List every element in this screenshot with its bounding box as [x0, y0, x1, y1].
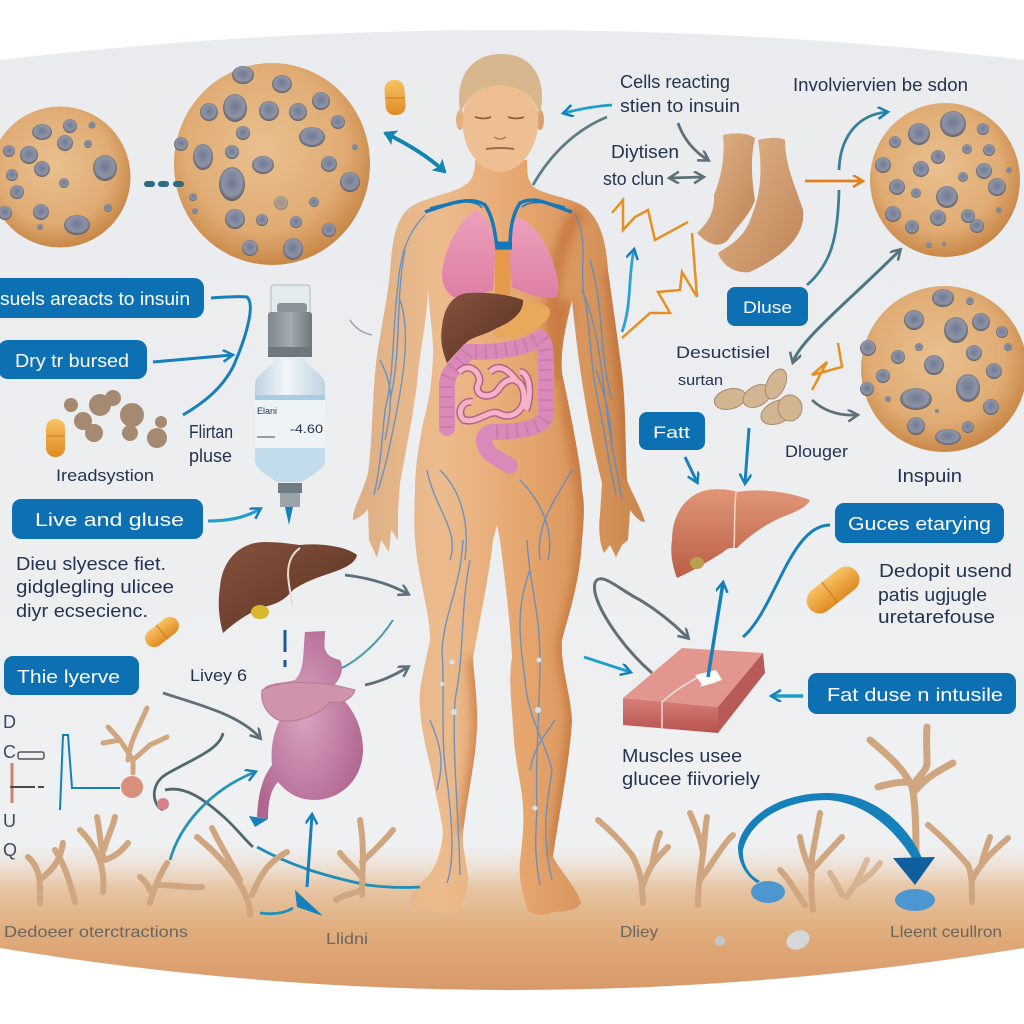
bottom labels: Dedoeer oterctractions: [4, 924, 188, 941]
label: this lyerve button: Thie lyerve: [17, 667, 120, 687]
text: dedopit: uretarefouse: [878, 607, 995, 627]
cell top right: [870, 103, 1020, 257]
ecg trace and side letters: C: [3, 742, 16, 762]
vein nodes: [440, 658, 542, 810]
internal liver: [441, 293, 550, 363]
label: fatt button: [639, 412, 705, 450]
lungs: [442, 210, 558, 298]
arrows to liver: [685, 428, 749, 483]
aorta: [495, 250, 510, 295]
label: cells reacting: [620, 72, 740, 116]
left arrows: [154, 320, 420, 914]
label: this lyerve button: [4, 656, 139, 695]
label: dlytisen: [603, 142, 679, 189]
text: muscles use glucose: Muscles usee: [622, 746, 742, 766]
muscle block: [623, 648, 765, 733]
ecg trace and side letters: Q: [3, 840, 17, 860]
pill near text: [141, 613, 183, 651]
right liver: [671, 489, 810, 578]
label: dlytisen: sto clun: [603, 169, 664, 189]
label: desuctiviel: [676, 343, 770, 389]
text: dedopit: [878, 561, 1012, 627]
text: dieu slysesce: [16, 554, 174, 621]
text: flirtan pluse: pluse: [189, 446, 232, 466]
label: dluse button: Dluse: [743, 298, 792, 317]
label: guces etarying: [835, 503, 1004, 543]
insulin vial: -4.60: [290, 422, 323, 436]
roots and twigs: [28, 727, 1008, 915]
dashes between cells: [144, 181, 184, 187]
bottom labels: [4, 924, 1002, 948]
left liver: [219, 542, 357, 633]
text: livey: Livey 6: [190, 666, 247, 685]
label: fat duse button: Fat duse n intusile: [827, 685, 1003, 705]
label: desuctiviel: Desuctisiel: [676, 343, 770, 362]
label: fatt button: Fatt: [653, 423, 690, 442]
text: dieu slysesce: Dieu slyesce fiet.: [16, 554, 166, 574]
blue pills on ground: [751, 881, 935, 911]
label: dry button: [0, 340, 147, 379]
stomach: [249, 630, 363, 827]
label: inspuin: Inspuin: [897, 466, 962, 486]
blue great vessels: [425, 200, 572, 248]
bottom labels: Llidni: [326, 931, 368, 948]
grey pebbles: [715, 927, 813, 953]
text: dedopit: Dedopit usend: [879, 561, 1012, 581]
text: dieu slysesce: gidglegling ulicee: [16, 577, 174, 597]
cell top centre: [174, 63, 370, 265]
text: flirtan pluse: Flirtan: [189, 422, 233, 442]
big blue arrow: [738, 793, 935, 885]
label: fat duse button: [808, 673, 1016, 714]
arrows left top: [153, 297, 260, 521]
intestines: [447, 338, 546, 466]
insulin vial: Elani: [257, 406, 277, 416]
right pill: [801, 561, 865, 619]
pill top: [384, 79, 406, 116]
label: guces etarying: Guces etarying: [848, 514, 991, 534]
pink blob on nerve: [157, 798, 169, 810]
label: cells reacting: Cells reacting: [620, 72, 730, 92]
organ: tan pancreas: [697, 133, 803, 272]
label: live and gluse button: [12, 499, 203, 539]
text: flirtan pluse: [189, 422, 233, 466]
label: suels button: suels areacts to insuin: [0, 289, 190, 309]
cell middle right: [860, 286, 1024, 452]
text: ireadsystion: Ireadsystion: [56, 466, 154, 485]
label: suels button: [0, 278, 204, 318]
head: [456, 54, 544, 172]
small fat lumps: [712, 366, 802, 430]
label: desuctiviel: surtan: [678, 372, 723, 389]
body figure: [353, 54, 645, 915]
veins: [374, 215, 622, 885]
blue foot shape: [295, 890, 323, 916]
bottom labels: Dliey: [620, 924, 658, 941]
cell top left: [0, 106, 130, 248]
zigzag signals: [612, 200, 842, 390]
arrows around muscle: [584, 525, 830, 696]
text: dieu slysesce: diyr ecsecienc.: [16, 601, 148, 621]
arrows top right: [385, 105, 900, 415]
label: dlouger: Dlouger: [785, 442, 848, 461]
label: dluse button: [727, 287, 808, 326]
bottom labels: Lleent ceullron: [890, 924, 1002, 941]
label: involvement: Involviervien be sdon: [793, 75, 968, 95]
text: dedopit: patis ugjugle: [878, 585, 987, 605]
label: dlytisen: Diytisen: [611, 142, 679, 162]
ecg trace and side letters: D: [3, 712, 16, 732]
text: muscles use glucose: glucee fiivoriely: [622, 769, 760, 789]
insulin vial: [255, 285, 325, 525]
ecg trace and side letters: [3, 708, 167, 860]
label: cells reacting: stien to insuin: [620, 96, 740, 116]
ecg trace and side letters: U: [3, 811, 16, 831]
label: live and gluse button: Live and gluse: [35, 510, 184, 530]
label: dry button: Dry tr bursed: [15, 351, 129, 371]
text: muscles use glucose: [622, 746, 760, 789]
brown particles: [64, 390, 167, 448]
left pill: [46, 419, 65, 457]
